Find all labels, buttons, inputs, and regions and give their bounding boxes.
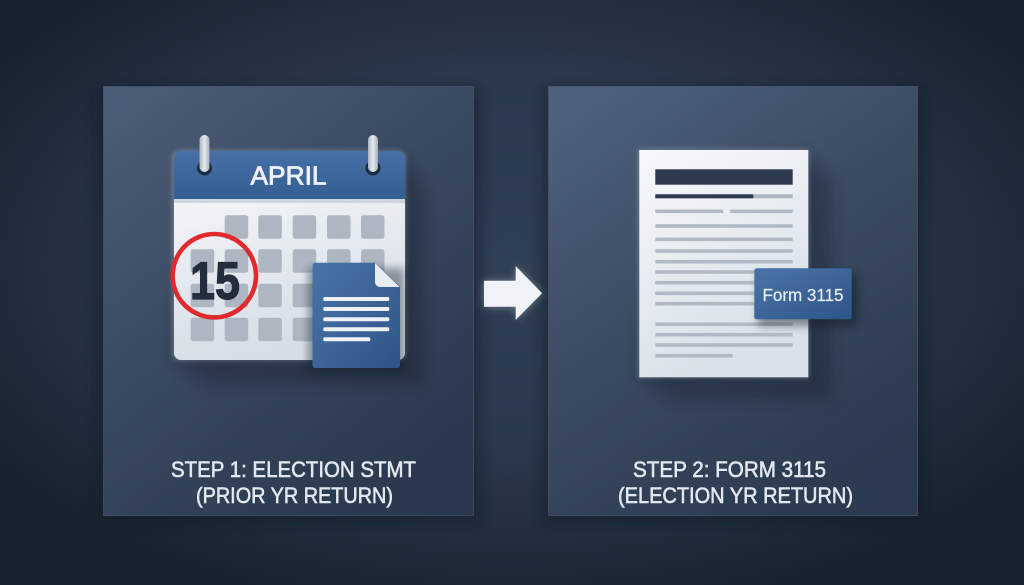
calendar header (174, 151, 405, 199)
step 1 label (171, 457, 416, 508)
date number 15: 15 (190, 252, 240, 311)
document title bar (655, 169, 793, 185)
calendar body (174, 190, 405, 360)
day grid (191, 215, 384, 341)
step 1 label: STEP 1: ELECTION STMT (171, 457, 416, 482)
panel: step 1 (98, 86, 480, 522)
document icon (308, 263, 404, 372)
Form 3115 badge: Form 3115 (762, 285, 844, 305)
icon: form document (638, 149, 858, 400)
document subtitle bar (655, 194, 793, 198)
arrow: step 1 to step 2 (484, 266, 542, 320)
step 2 label: STEP 2: FORM 3115 (633, 457, 826, 482)
red date circle (173, 234, 256, 317)
document text lines (655, 210, 793, 358)
month label: APRIL (250, 162, 326, 190)
Form 3115 badge (754, 268, 858, 326)
step 1 label: (PRIOR YR RETURN) (196, 483, 393, 508)
binder rings (197, 135, 380, 176)
step 2 label: (ELECTION YR RETURN) (618, 483, 853, 508)
step 2 label (618, 457, 853, 508)
panel: step 2 (543, 86, 924, 522)
icon: calendar with document (172, 135, 425, 385)
